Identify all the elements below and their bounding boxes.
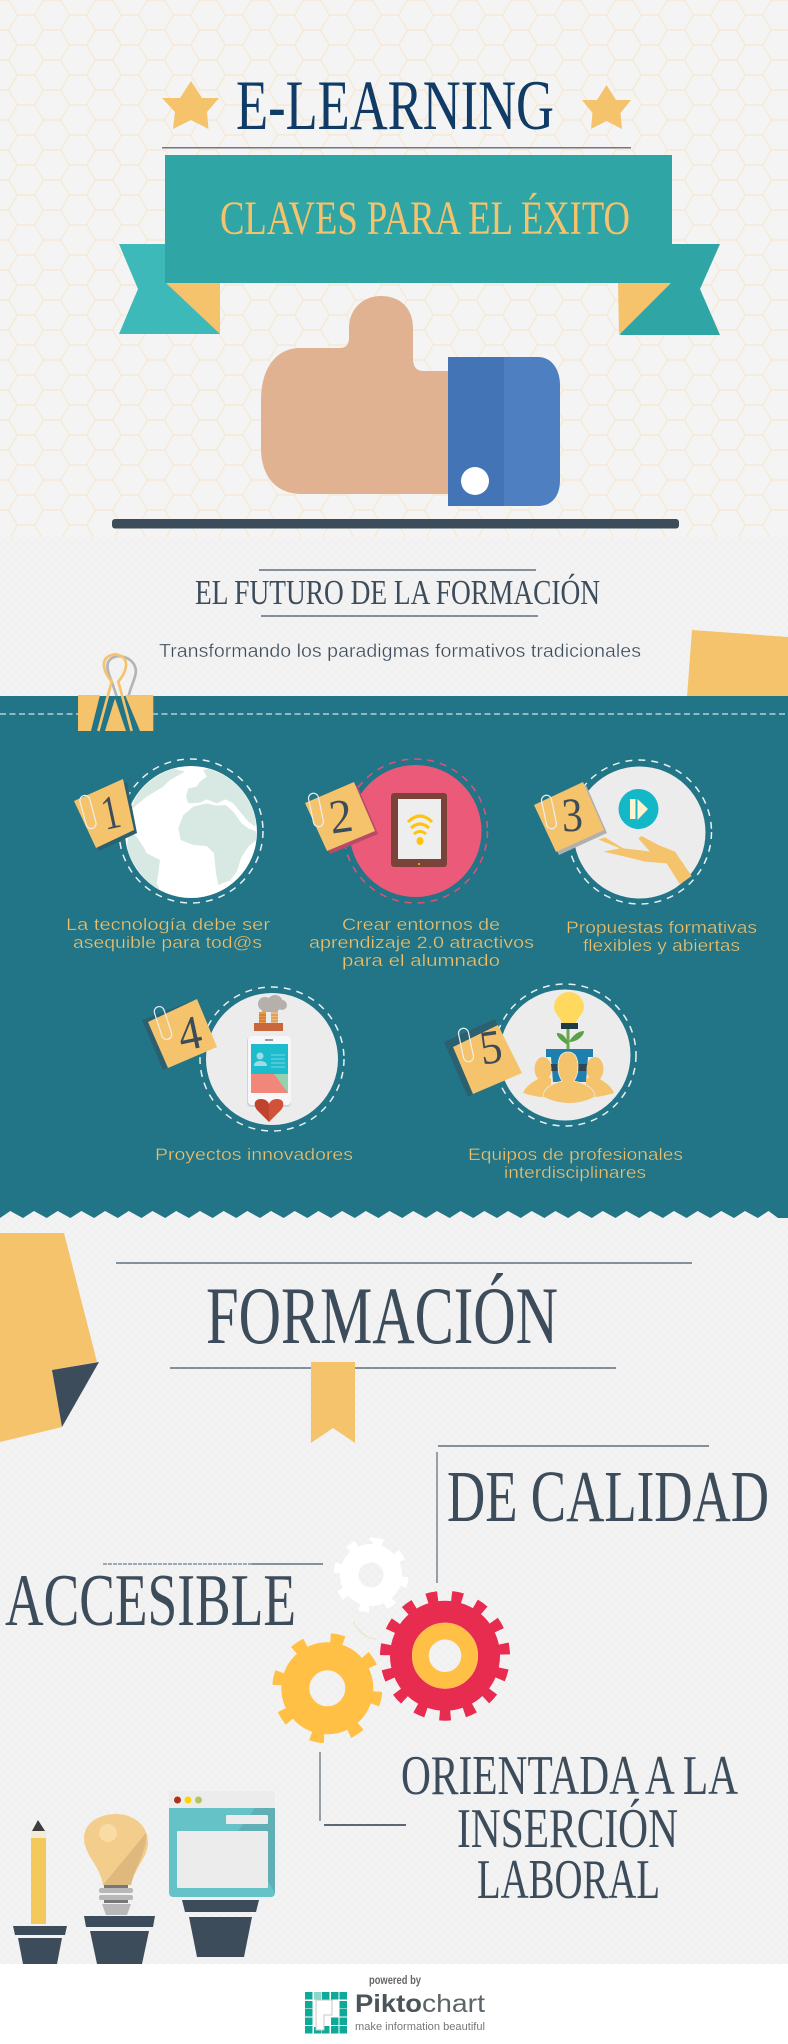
icon: piktochart logo	[305, 1992, 347, 2034]
label 2	[309, 915, 534, 970]
label 5: interdisciplinares	[504, 1163, 646, 1182]
label 4: Proyectos innovadores	[155, 1145, 353, 1164]
sticky note 4: 4	[173, 1006, 207, 1062]
footer	[0, 1964, 788, 2044]
item 5: interdisciplinary teams	[444, 984, 683, 1182]
sticky note 1	[74, 779, 137, 851]
heading: formación: FORMACIÓN	[206, 1270, 558, 1361]
label 1: asequible para tod@s	[73, 933, 262, 952]
label 1: La tecnología debe ser	[66, 915, 270, 934]
label 3: Propuestas formativas	[566, 918, 757, 937]
icon: browser window in pot	[169, 1791, 275, 1957]
icon: hand	[598, 836, 692, 884]
sticky note 3	[534, 782, 607, 855]
shelf	[112, 519, 679, 528]
sticky note 4	[142, 999, 217, 1070]
label 1	[66, 915, 270, 952]
callout: orientada a la inserción laboral	[320, 1745, 738, 1911]
icon: heart	[255, 1099, 283, 1122]
sticky note 1: 1	[96, 785, 125, 841]
label 5: Equipos de profesionales	[468, 1145, 683, 1164]
piktochart wordmark: make information beautiful	[355, 2021, 485, 2033]
item 4: innovative projects	[142, 987, 353, 1164]
bookmark ribbon	[311, 1362, 355, 1443]
icon: phone	[247, 1036, 291, 1107]
icon: play button	[618, 789, 658, 829]
callout: orientada a la inserción laboral: LABORAL	[477, 1849, 660, 1911]
header block	[162, 67, 631, 148]
label 2: Crear entornos de	[342, 915, 500, 934]
item 2: tablet	[305, 759, 534, 970]
sticky note 5: 5	[476, 1020, 505, 1075]
label 3	[566, 918, 757, 955]
icon: left star	[162, 81, 219, 129]
label 5	[468, 1145, 683, 1182]
icon: pencil in pot	[13, 1820, 67, 1964]
icon: red gear	[374, 1585, 516, 1726]
callout: orientada a la inserción laboral: INSERCIÓN	[457, 1797, 678, 1860]
sticky note 5	[444, 1019, 522, 1097]
icon: plant bulb	[546, 992, 593, 1082]
item 1: technology	[66, 759, 270, 952]
label 2: aprendizaje 2.0 atractivos	[309, 933, 534, 952]
label 3: flexibles y abiertas	[583, 936, 740, 955]
sticky note 3: 3	[560, 789, 584, 843]
piktochart wordmark: Pikto	[355, 1990, 422, 2018]
panel: teal section	[0, 696, 788, 1218]
icon: right star	[582, 85, 631, 129]
icon: yellow gear	[275, 1636, 380, 1741]
section heading: el futuro de la formación: EL FUTURO DE LA FORMACIÓN	[195, 572, 600, 612]
callout: accesible: ACCESIBLE	[5, 1560, 296, 1642]
piktochart wordmark	[355, 1990, 485, 2033]
icon: tablet	[391, 793, 447, 867]
label 2: para el alumnado	[342, 951, 500, 970]
yellow note corner	[687, 630, 788, 697]
footer: powered by	[369, 1975, 421, 1987]
folded yellow note	[0, 1233, 99, 1442]
title: E-LEARNING	[236, 67, 554, 145]
sticky note 2: 2	[326, 789, 356, 844]
icon: globe	[125, 766, 257, 898]
ribbon banner	[119, 155, 720, 335]
icon: thumbs up	[261, 296, 560, 506]
item 3: flexible proposals	[534, 760, 757, 955]
subtitle: CLAVES PARA EL ÉXITO	[220, 192, 630, 245]
tagline: Transformando los paradigmas formativos tradicionales	[159, 641, 641, 661]
icon: white gear	[336, 1540, 406, 1610]
icon: team	[523, 1052, 614, 1104]
icon: factory	[254, 995, 287, 1031]
icon: light bulb in pot	[84, 1814, 155, 1964]
icon: binder clip	[78, 654, 153, 731]
icon: gears	[275, 1540, 516, 1741]
sticky note 2	[305, 782, 378, 854]
piktochart wordmark: chart	[422, 1990, 485, 2018]
